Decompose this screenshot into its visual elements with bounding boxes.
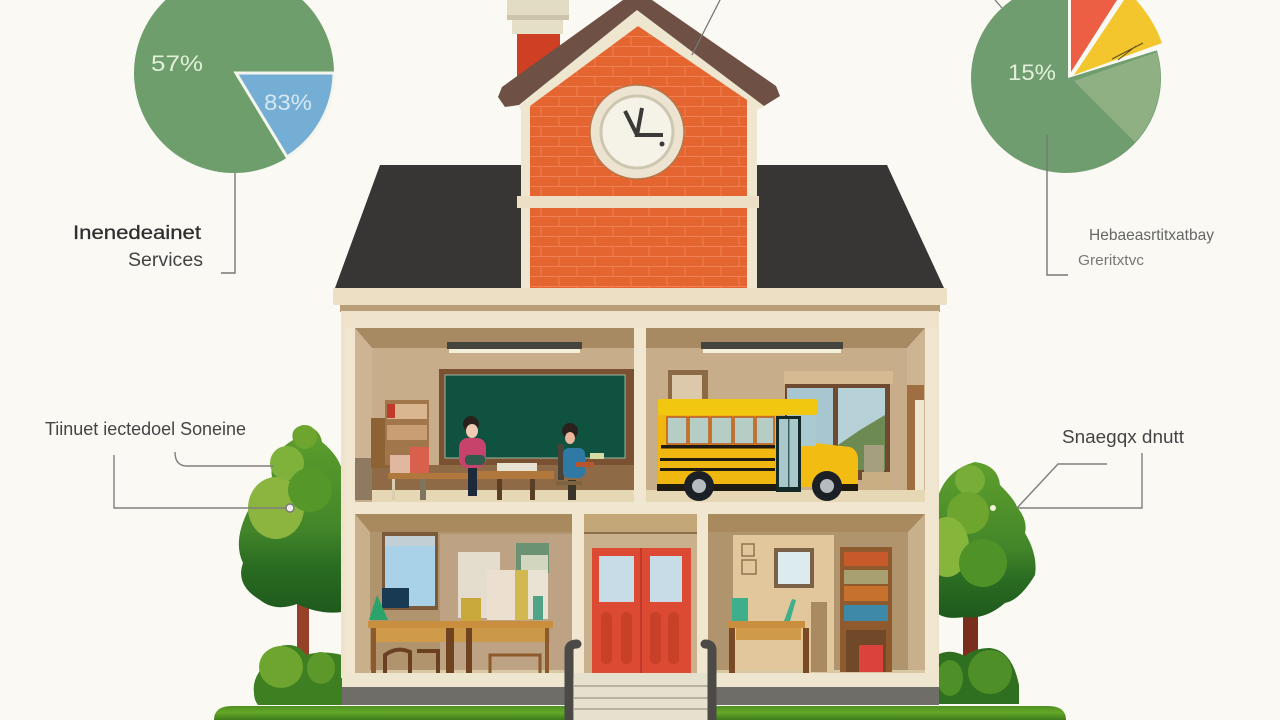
lawn left (214, 706, 566, 720)
panel: right pie chart (971, 0, 1164, 173)
foliage highlight: top (955, 465, 985, 495)
columns (345, 328, 937, 678)
right tree (939, 462, 1036, 704)
wall picture (668, 370, 708, 402)
foliage highlight: middle (959, 539, 1007, 587)
foliage (239, 425, 342, 613)
pie: yellow slice mark (1112, 43, 1143, 60)
panel: left pie chart (134, 0, 334, 173)
bus body (658, 415, 780, 488)
upper right classroom (646, 328, 925, 502)
desk (368, 621, 553, 673)
person: teacher (459, 416, 486, 496)
bus stripes (657, 445, 858, 491)
lower left classroom (355, 514, 572, 673)
left tree (239, 425, 342, 705)
leader line: clock tower to top (692, 0, 720, 55)
label: right pie: Greritxtvc (1078, 252, 1145, 269)
label: left pie: Inenedeainet (73, 223, 202, 244)
paper stack (390, 447, 429, 474)
bookshelf (371, 400, 429, 468)
value: 57%: 57% (151, 51, 203, 76)
building facade (341, 328, 939, 678)
chimney (507, 0, 569, 78)
foliage highlight: large (248, 477, 304, 539)
window (382, 532, 438, 610)
label: right pie (1078, 227, 1214, 269)
label: right pie: Hebaeasrtitxatbay (1089, 227, 1214, 244)
ceiling light (447, 342, 582, 353)
pie: blue slice (236, 73, 334, 157)
label: right tree: Snaegqx dnutt (1062, 427, 1184, 447)
tower brick upper (530, 26, 747, 196)
value: 15%: 15% (1008, 60, 1056, 85)
framed picture (774, 548, 814, 588)
school building (333, 288, 947, 720)
tower band (517, 196, 759, 208)
upper left classroom (355, 328, 634, 502)
bookcase (840, 547, 892, 672)
foliage highlight: upper (270, 446, 304, 480)
pie: main green slice (971, 0, 1161, 173)
leader lines: right tree (990, 453, 1142, 511)
trunk (297, 600, 309, 655)
bus door (776, 416, 801, 492)
entry steps (574, 673, 708, 720)
bus windows (667, 417, 774, 444)
label: left pie: Services (128, 250, 203, 271)
red double door (592, 548, 691, 673)
poster wall (733, 535, 834, 670)
lower center entry (584, 514, 697, 673)
clock tower (498, 0, 780, 290)
person: student (556, 423, 604, 500)
pie: main green slice (134, 0, 334, 173)
frieze (341, 311, 939, 329)
foliage (937, 462, 1036, 618)
pie: yellow slice (1074, 0, 1162, 75)
label: left pie (73, 223, 203, 271)
clock (590, 85, 684, 179)
foliage highlight: middle (288, 468, 332, 512)
desk (727, 598, 827, 673)
stair railings (569, 644, 712, 720)
door windows (599, 556, 634, 602)
lower right classroom (708, 514, 925, 673)
leader tick: right pie top (995, 0, 1002, 8)
gable roof (498, 0, 780, 107)
pie: light green slice (1074, 52, 1160, 142)
foundation (342, 673, 939, 705)
left main roof (335, 165, 522, 288)
laptop (369, 588, 409, 620)
lawn right (714, 706, 1066, 720)
bus hood (801, 415, 858, 487)
door panels (601, 612, 679, 664)
foliage highlight: top (293, 425, 317, 449)
bush (937, 648, 1019, 704)
cornice (333, 288, 947, 305)
foliage highlight: upper (947, 492, 989, 534)
bus front window (801, 415, 816, 446)
tower brick lower (530, 208, 747, 288)
right main roof (757, 165, 944, 288)
bus roof (658, 399, 817, 415)
pie: red slice (1071, 0, 1117, 72)
foliage highlight: side (939, 517, 969, 577)
sketches (742, 544, 756, 574)
leader line: left pie to label (221, 173, 235, 273)
ceiling light (701, 342, 843, 353)
bush (254, 645, 342, 705)
tower trim (519, 8, 764, 290)
label: left tree: Tiinuet iectedoel Soneine (45, 419, 246, 439)
leader lines: left tree (114, 452, 294, 512)
school bus (657, 399, 858, 501)
chalkboard (439, 369, 634, 465)
window (784, 371, 893, 490)
desks (388, 463, 554, 500)
value: 83%: 83% (264, 90, 312, 115)
side door (907, 385, 924, 490)
trunk (963, 616, 978, 656)
bus wheels (684, 471, 842, 501)
pie: light backing gap (1068, 0, 1164, 78)
wall papers (458, 543, 549, 622)
leader line: right pie to label (1047, 135, 1068, 275)
